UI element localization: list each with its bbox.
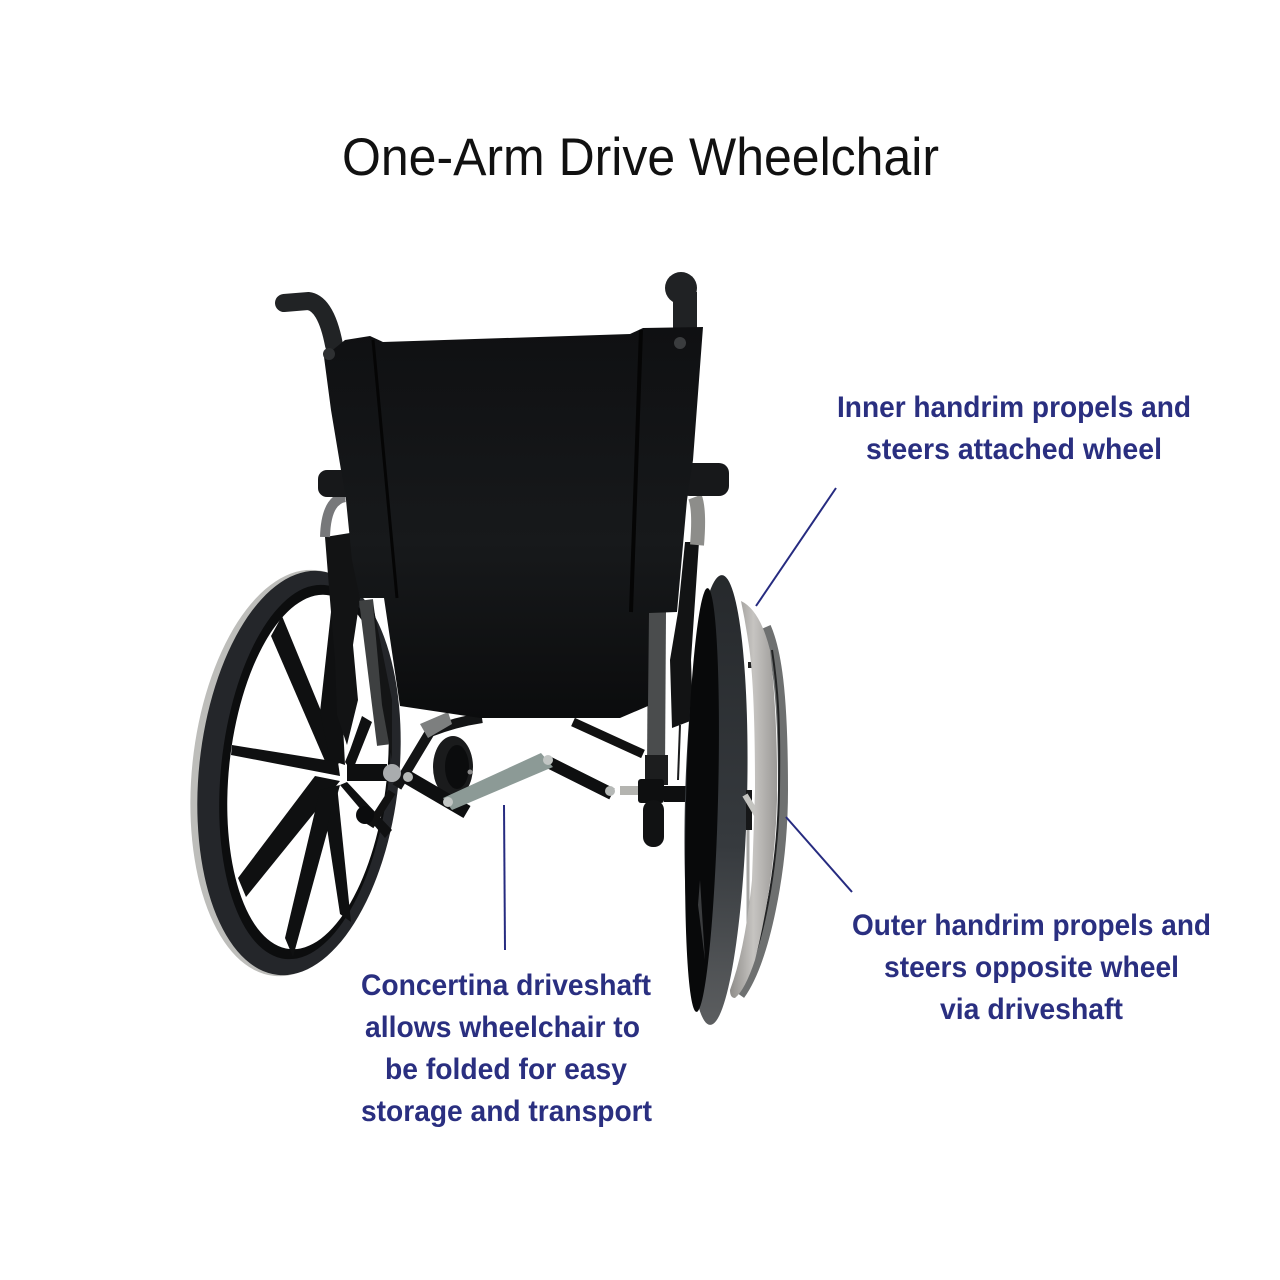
inner handrim bbox=[730, 601, 777, 998]
seat back upholstery bbox=[323, 327, 703, 718]
left wheel spokes bbox=[231, 606, 392, 957]
front right caster post bbox=[643, 800, 664, 847]
callout: outer handrim: steers opposite wheel bbox=[884, 951, 1179, 984]
callout: inner handrim: Inner handrim propels and bbox=[837, 391, 1191, 424]
leader line: driveshaft bbox=[504, 805, 505, 950]
left handrim behind wheel bbox=[305, 603, 367, 936]
leader line: outer handrim bbox=[786, 817, 852, 892]
right wheel bbox=[679, 574, 753, 1026]
callout: concertina driveshaft: storage and transport bbox=[361, 1095, 652, 1128]
leader line: inner handrim bbox=[756, 488, 836, 606]
left frame and brake bbox=[325, 497, 482, 826]
concertina driveshaft bbox=[403, 753, 690, 812]
callout: outer handrim: via driveshaft bbox=[940, 993, 1123, 1026]
front caster bbox=[433, 736, 473, 798]
callout: inner handrim bbox=[837, 391, 1191, 466]
title: One-Arm Drive Wheelchair bbox=[342, 128, 939, 187]
wheelchair photo illustration bbox=[171, 272, 783, 1026]
right frame bbox=[573, 497, 699, 785]
spacer rods and chrome bbox=[745, 665, 757, 960]
callout: concertina driveshaft: be folded for easy bbox=[385, 1053, 627, 1086]
outer handrim bbox=[740, 627, 783, 995]
callout: concertina driveshaft: allows wheelchair to bbox=[365, 1011, 640, 1044]
callout: outer handrim: Outer handrim propels and bbox=[852, 909, 1211, 942]
callout: concertina driveshaft bbox=[361, 969, 652, 1128]
left rear wheel bbox=[171, 559, 420, 987]
callout: outer handrim bbox=[852, 909, 1211, 1026]
right handle bbox=[665, 272, 697, 334]
callout: inner handrim: steers attached wheel bbox=[866, 433, 1162, 466]
left handle bbox=[284, 301, 334, 345]
armrests bbox=[318, 463, 729, 497]
callout: concertina driveshaft: Concertina driveshaft bbox=[361, 969, 651, 1002]
